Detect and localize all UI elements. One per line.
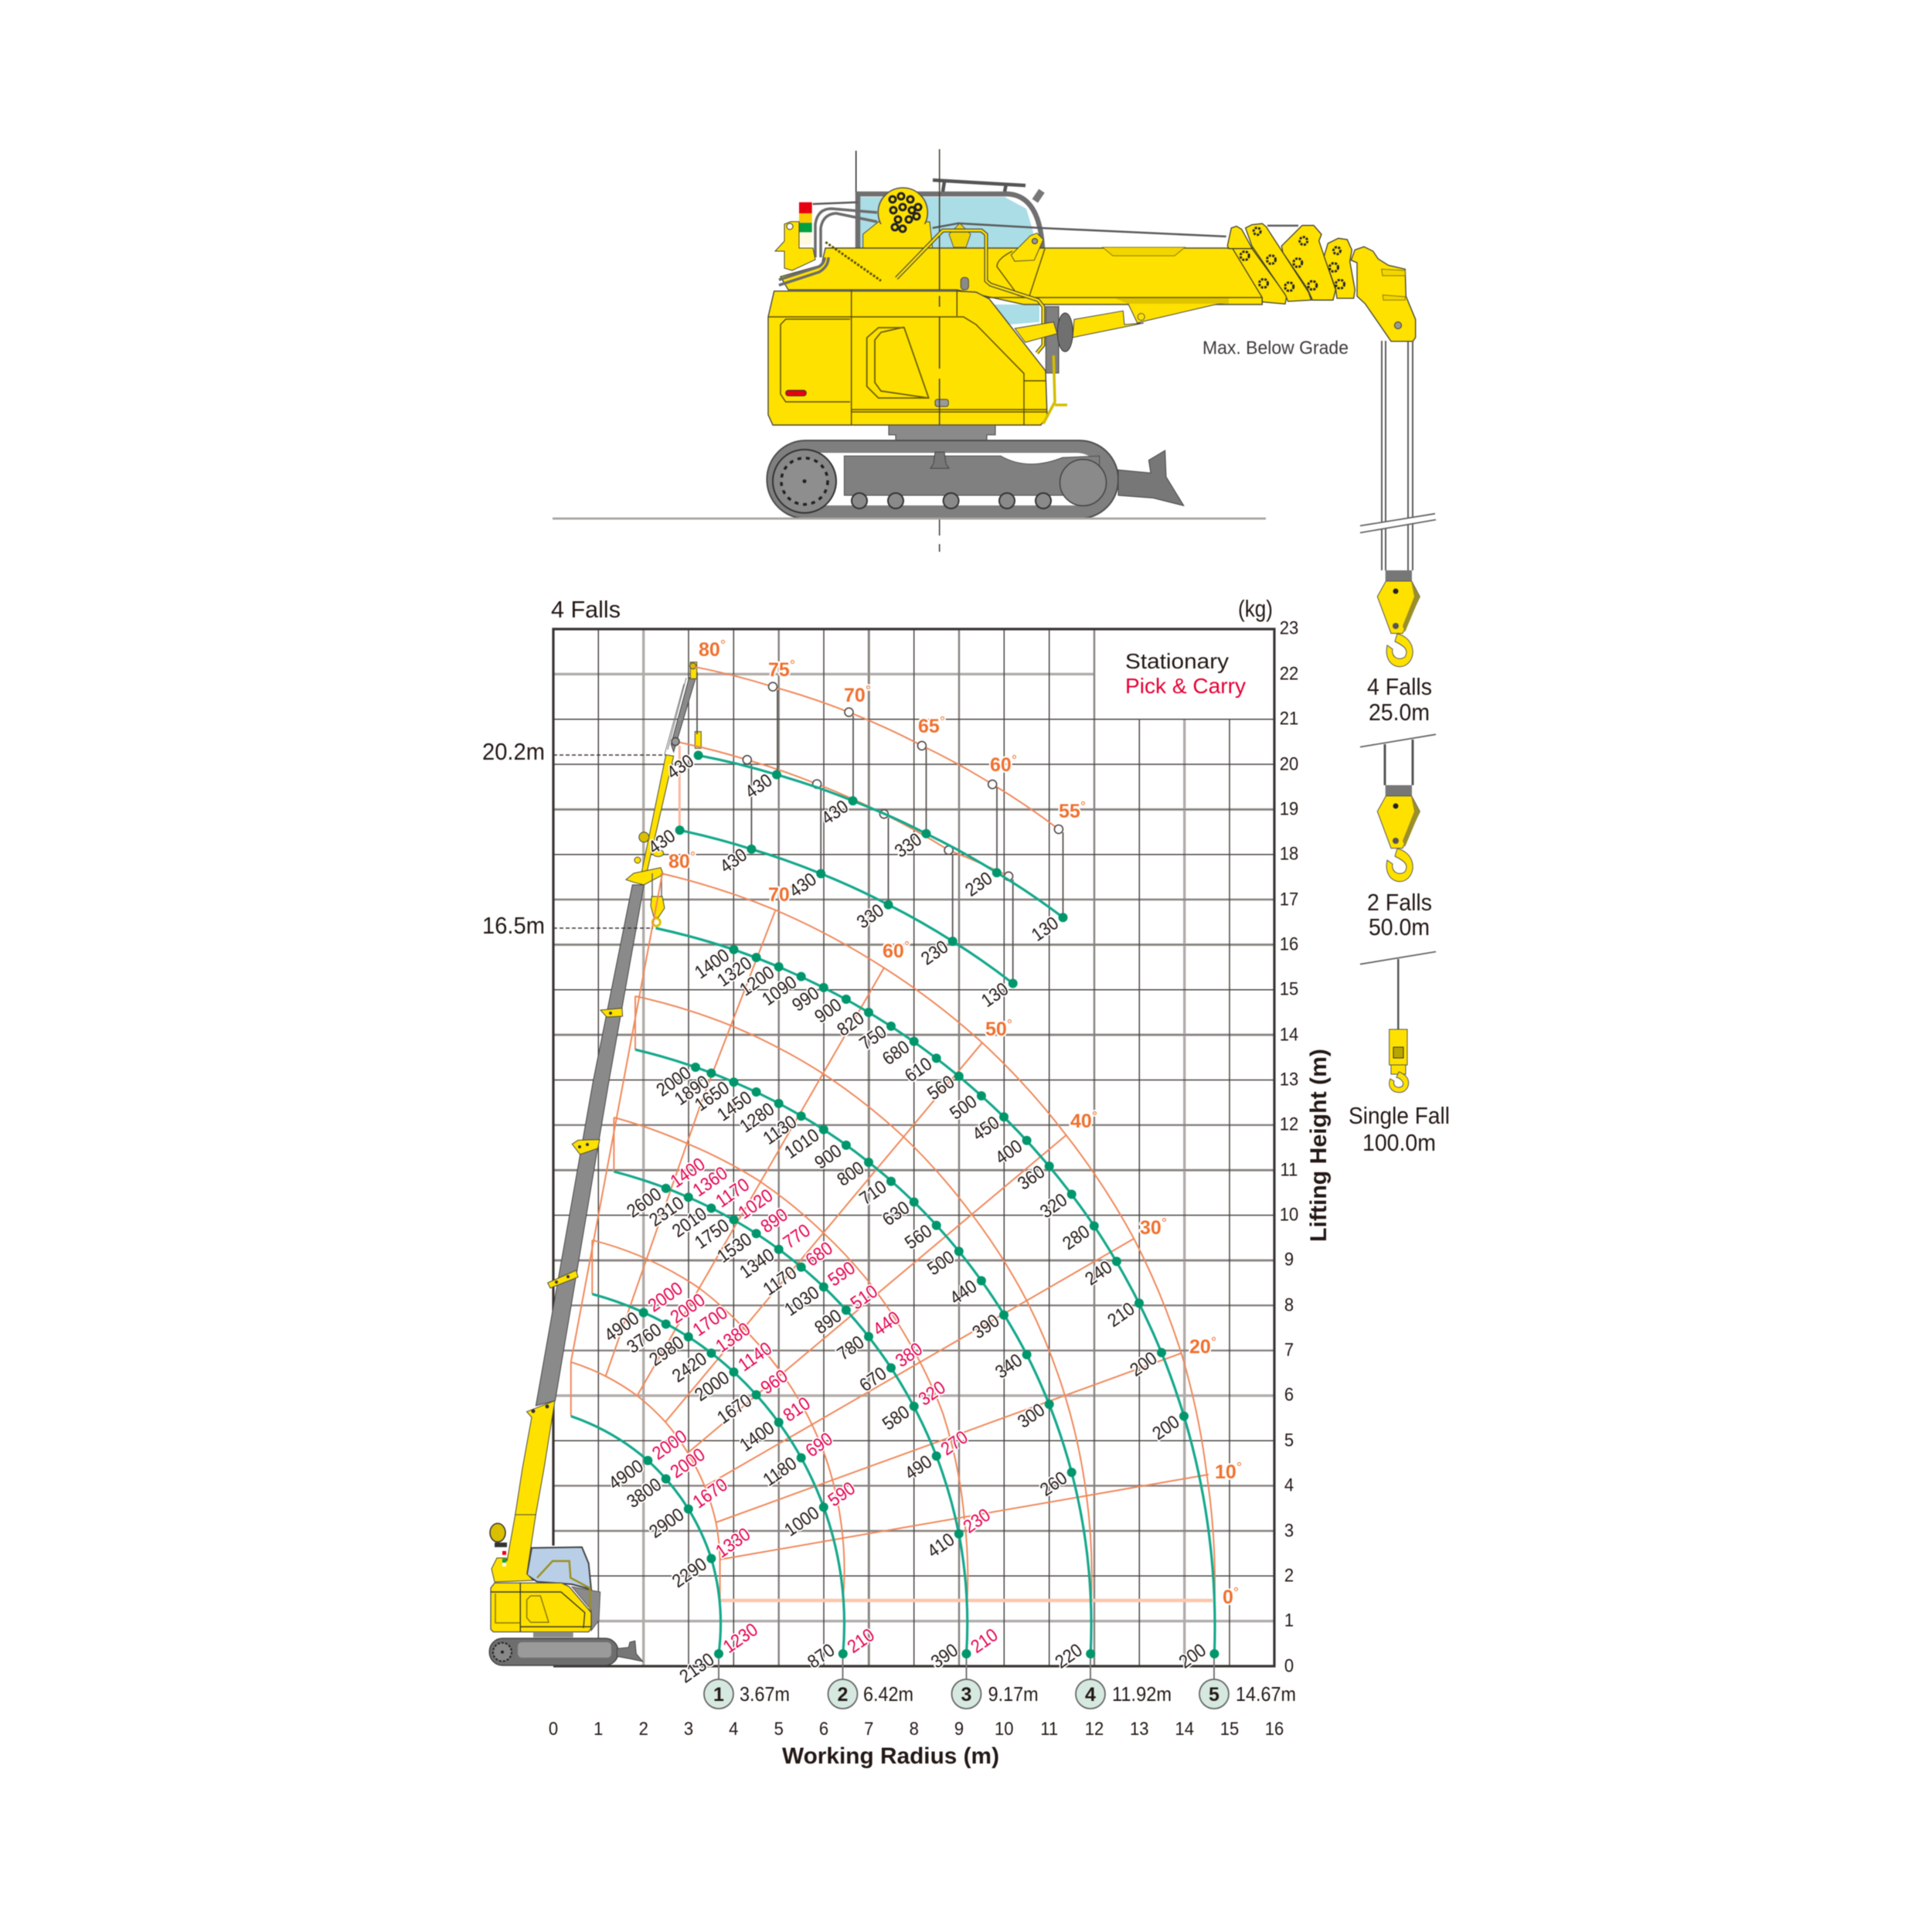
load points: boom position 3: 780 [833, 1331, 868, 1364]
serrated brace [825, 242, 881, 281]
load points: boom position 3: 1170 [712, 1174, 753, 1212]
load points: boom position 5: 200 [1148, 1410, 1183, 1444]
load points: boom position 2: 1140 [734, 1338, 776, 1376]
crane main illustration [553, 149, 1416, 552]
bottom axis: working radius ticks: 7 [864, 1718, 873, 1739]
lower window [995, 304, 1039, 325]
track frame [844, 456, 1100, 495]
load points: boom position 2: 4900 [600, 1307, 643, 1345]
load points: boom position 2: 810 [779, 1393, 814, 1426]
load points: boom position 5: 200 [1126, 1347, 1161, 1380]
boom underside line [985, 297, 1262, 298]
angle labels: 20 [1189, 1336, 1211, 1358]
boom foot fairing [997, 249, 1045, 296]
load points: jib upper curve: 430 [662, 750, 698, 783]
right axis: lifting height ticks: 2 [1284, 1565, 1294, 1586]
load points: boom position 3: 510 [846, 1281, 881, 1314]
body handle [935, 400, 948, 406]
raised boom on chart [515, 662, 701, 1515]
left post [775, 222, 815, 270]
load points: boom position 5: 610 [901, 1053, 936, 1086]
load points: boom position 5: 900 [811, 994, 845, 1027]
load points: boom position 5: 750 [855, 1021, 890, 1054]
load points: boom position 4: 340 [991, 1349, 1026, 1383]
head sheave pin [1394, 321, 1402, 329]
axis title: lifting height: Lifting Height (m) [1306, 1049, 1332, 1242]
load points: boom position 5: 450 [968, 1111, 1003, 1145]
load points: boom position 4: 2000 [652, 1062, 695, 1100]
upper cable [813, 202, 1298, 236]
numbered boom length markers: 2 [838, 1684, 848, 1706]
load points: boom position 2: 1000 [781, 1502, 823, 1540]
angle labels [668, 638, 1242, 1608]
hollow jib tip markers [672, 682, 1063, 880]
angle labels: 65 [918, 716, 940, 737]
load points: boom position 2: 690 [801, 1428, 836, 1461]
angle labels: 70 [844, 685, 866, 706]
luffing cylinder and strut [1015, 298, 1229, 342]
rear mechanism [1046, 307, 1059, 373]
angle labels: ° [1012, 753, 1017, 768]
legend: stationary and pick and carry: Stationary [1125, 649, 1229, 673]
hook block: single fall [1360, 952, 1436, 1093]
bottom axis: working radius ticks: 6 [819, 1718, 828, 1739]
right axis: lifting height ticks: 10 [1280, 1204, 1298, 1225]
load points: jib upper curve: 230 [961, 867, 996, 900]
numbered boom length markers: 1 [713, 1684, 724, 1706]
bottom axis: working radius ticks: 11 [1040, 1718, 1058, 1739]
load points: jib upper curve: 430 [817, 795, 852, 828]
right axis: lifting height ticks: 17 [1280, 889, 1298, 910]
angle labels: 0 [1223, 1587, 1233, 1608]
axis title: working radius: Working Radius (m) [782, 1743, 999, 1769]
text: 2 falls 50.0m [1367, 889, 1432, 940]
load points: boom position 3: 2010 [668, 1202, 710, 1241]
boom head [1351, 247, 1416, 342]
boom pad [1103, 247, 1185, 256]
bottom axis: working radius ticks: 3 [684, 1718, 693, 1739]
load points: boom position 4: 900 [811, 1140, 845, 1173]
right axis: lifting height ticks: 6 [1284, 1384, 1294, 1405]
load points: boom position 4: 1280 [736, 1098, 778, 1137]
angle labels: ° [1007, 1017, 1012, 1032]
load points: boom position 4: 1450 [713, 1087, 756, 1125]
bottom axis: working radius ticks: 10 [995, 1718, 1014, 1739]
legend: stationary and pick and carry [1125, 649, 1246, 698]
load points: boom position 3: 1170 [759, 1262, 801, 1300]
load points: jib upper curve: 130 [1027, 912, 1063, 945]
hose over frame [779, 257, 828, 285]
load points: boom position 2: 2000 [644, 1277, 686, 1316]
right axis: lifting height ticks: 21 [1280, 708, 1298, 729]
load points: jib lower curve: 330 [852, 900, 888, 933]
load points: boom position 3: 410 [923, 1529, 958, 1562]
load points: boom position 3: 1030 [781, 1281, 823, 1320]
bottom axis: working radius ticks: 0 [549, 1718, 558, 1739]
track rollers [852, 493, 1051, 509]
load points: boom position 5: 280 [1059, 1220, 1094, 1253]
angle labels: ° [1233, 1585, 1239, 1600]
angle labels: 40 [1070, 1111, 1092, 1132]
angle labels: ° [690, 849, 696, 865]
dozer blade [1118, 451, 1184, 505]
load points: boom position 4: 560 [901, 1220, 936, 1253]
bottom axis: working radius ticks: 15 [1220, 1718, 1239, 1739]
angle labels: ° [1211, 1335, 1216, 1350]
ground line [553, 518, 1266, 519]
right axis: lifting height ticks: 8 [1284, 1294, 1294, 1315]
signal tower [799, 202, 812, 245]
load points: boom position 1: 2000 [666, 1444, 709, 1482]
boom plates [1227, 223, 1355, 304]
bottom axis: working radius ticks: 5 [774, 1718, 784, 1739]
center swivel [930, 452, 949, 468]
right axis: lifting height ticks: 18 [1280, 843, 1298, 864]
unit: kg: (kg) [1238, 595, 1273, 622]
load points: boom position 2: 2420 [668, 1348, 710, 1386]
yellow body [768, 291, 1047, 425]
angle labels: ° [790, 883, 795, 898]
load points: boom position 2: 210 [843, 1624, 878, 1657]
angle labels: 75 [768, 659, 790, 681]
right axis: lifting height ticks: 7 [1284, 1339, 1294, 1360]
body panel lines [768, 290, 1047, 425]
mirror [1035, 191, 1042, 201]
jib hoist ropes from hollow tip points [697, 672, 1063, 983]
load points: boom position 1: 2000 [648, 1425, 691, 1464]
top handrail [933, 180, 1026, 192]
load points: boom position 4: 1010 [781, 1124, 823, 1162]
load points: boom position 3: 770 [779, 1219, 814, 1253]
text: 2 falls 50.0m: 50.0m [1369, 913, 1430, 940]
numbered boom length markers: 11.92m [1112, 1682, 1172, 1706]
hydraulic hoses [779, 209, 877, 285]
bottom axis: working radius ticks [549, 1718, 1284, 1739]
load points: jib lower curve: 230 [917, 936, 952, 969]
right axis: lifting height ticks: 11 [1281, 1159, 1298, 1180]
idler [1060, 459, 1107, 505]
load points: boom position 5: 1200 [736, 961, 778, 1000]
load points: boom position 3: 320 [914, 1376, 949, 1410]
angle labels: ° [1092, 1109, 1097, 1124]
load points: boom position 4: 1890 [670, 1071, 713, 1109]
right axis: lifting height ticks: 14 [1280, 1024, 1298, 1045]
label: max below grade: Max. Below Grade [1202, 338, 1349, 359]
small crane at chart base [489, 1515, 643, 1665]
load points: boom position 3: 2600 [623, 1183, 665, 1222]
load points: boom position 1: 2900 [645, 1504, 688, 1542]
load points: boom position 3 [623, 1153, 1002, 1672]
right axis: lifting height ticks: 13 [1280, 1069, 1298, 1090]
load points: boom position 1: 3800 [623, 1474, 665, 1512]
angle labels: ° [1162, 1216, 1167, 1231]
right axis: lifting height ticks: 1 [1284, 1610, 1294, 1631]
load points: boom position 1 [604, 1425, 761, 1687]
load points: boom position 2: 2000 [690, 1366, 733, 1405]
turntable [889, 425, 995, 440]
load points: boom position 5: 320 [1036, 1189, 1071, 1222]
load points: jib lower curve: 430 [644, 825, 679, 858]
load points: boom position 3: 440 [869, 1307, 904, 1340]
angle labels: ° [1080, 799, 1086, 815]
right axis: lifting height ticks: 9 [1284, 1249, 1294, 1270]
plate bolts [1240, 228, 1345, 291]
angle labels: ° [720, 638, 726, 653]
load points: boom position 3: 1360 [689, 1162, 731, 1201]
body door window [867, 327, 929, 398]
load points: boom position 1: 2290 [668, 1553, 710, 1592]
load points: jib upper curve: 330 [890, 828, 926, 862]
bottom axis: working radius ticks: 12 [1085, 1718, 1104, 1739]
load points: boom position 3: 2310 [645, 1192, 688, 1230]
load points: boom position 4 [652, 1062, 1095, 1672]
load points: boom position 3: 490 [901, 1451, 936, 1484]
load points: boom position 4: 390 [968, 1310, 1003, 1343]
text: 4 falls 25.0m [1367, 673, 1432, 726]
angle labels: ° [866, 683, 871, 699]
post detail [787, 223, 793, 230]
boom height callout: 16.5m: 16.5m [482, 912, 545, 939]
load points: jib lower curve [644, 825, 1018, 1011]
legend: stationary and pick and carry: Pick & Carry [1125, 674, 1246, 698]
angle labels: 80 [699, 639, 720, 661]
load points: boom position 3: 1530 [713, 1228, 756, 1267]
angle labels: 30 [1140, 1217, 1162, 1239]
text: single fall 100.0m: 100.0m [1362, 1129, 1436, 1156]
angle labels: ° [790, 658, 795, 673]
track outer [767, 440, 1118, 519]
angle labels: ° [904, 939, 910, 954]
angle labels: 55 [1059, 801, 1080, 822]
load points: boom position 5: 560 [923, 1071, 958, 1104]
hook block: 2 falls [1360, 734, 1436, 882]
load points: boom position 3: 210 [967, 1624, 1002, 1657]
load points: boom position 2: 3760 [623, 1318, 665, 1357]
load points: boom position 2: 2000 [666, 1289, 709, 1328]
hook block: 4 falls [1377, 570, 1420, 667]
load points: boom position 3: 1750 [690, 1214, 733, 1253]
angle labels: 50 [985, 1019, 1007, 1040]
load points: boom position 4: 630 [879, 1196, 913, 1230]
load points: boom position 4: 440 [946, 1275, 981, 1308]
load points: boom position 4: 500 [923, 1246, 958, 1279]
load points: boom position 3: 580 [879, 1401, 913, 1434]
load points: boom position 3: 590 [824, 1257, 859, 1291]
load points: jib upper curve [662, 750, 1068, 945]
load points: boom position 4: 1130 [759, 1111, 801, 1148]
load points: boom position 3: 1400 [666, 1153, 709, 1192]
winch [863, 188, 933, 248]
boom knob [961, 277, 968, 290]
right axis: lifting height ticks: 19 [1280, 798, 1298, 819]
load points: boom position 5: 200 [1175, 1639, 1209, 1672]
text: 4 falls 25.0m: 4 Falls [1367, 673, 1432, 700]
load points: boom position 2: 960 [757, 1365, 791, 1398]
load points: boom position 4: 710 [855, 1176, 890, 1209]
numbered boom length markers: 9.17m [988, 1682, 1039, 1706]
load points: boom position 3: 1020 [734, 1185, 777, 1223]
load points: boom position 3: 890 [811, 1304, 845, 1338]
text: single fall 100.0m: Single Fall [1349, 1102, 1450, 1129]
load points: boom position 1: 1330 [712, 1523, 754, 1562]
load points: boom position 3: 670 [855, 1362, 890, 1396]
boom foot lug [1011, 233, 1043, 261]
load points: boom position 1: 4900 [604, 1455, 647, 1494]
load points: boom position 1: 2130 [675, 1648, 718, 1687]
numbered boom length markers [704, 1658, 1296, 1709]
right axis: lifting height ticks [1280, 617, 1298, 1676]
load points: boom position 5: 210 [1104, 1298, 1138, 1331]
track inner gap [782, 453, 1103, 505]
load points: jib lower curve: 430 [785, 868, 820, 901]
load points: boom position 5 [690, 944, 1219, 1672]
load points: boom position 2: 1180 [759, 1452, 801, 1490]
load points: boom position 5: 1090 [758, 971, 801, 1009]
numbered boom length markers: 6.42m [863, 1682, 913, 1706]
load points: boom position 2: 1670 [713, 1389, 756, 1428]
yellow handrail [896, 230, 1043, 353]
step rail [1043, 355, 1067, 423]
load points: boom position 2: 1400 [736, 1417, 778, 1455]
load points: boom position 5: 1320 [713, 952, 756, 991]
bottom axis: working radius ticks: 9 [954, 1718, 964, 1739]
right axis: lifting height ticks: 4 [1284, 1475, 1294, 1495]
load points: boom position 2: 1380 [712, 1318, 754, 1356]
right axis: lifting height ticks: 12 [1280, 1114, 1298, 1134]
load points: boom position 5: 820 [833, 1007, 868, 1040]
right axis: lifting height ticks: 20 [1280, 753, 1298, 774]
boom height callout: 20.2m: 20.2m [482, 738, 545, 765]
bottom axis: working radius ticks: 8 [910, 1718, 919, 1739]
chart frame [553, 629, 1274, 1666]
load points: boom position 1: 1670 [689, 1474, 731, 1512]
load points: boom position 3: 230 [959, 1504, 994, 1537]
load points: boom position 5: 990 [788, 982, 823, 1015]
load points: boom position 5: 1400 [690, 944, 733, 983]
load points: boom position 3: 390 [927, 1639, 962, 1672]
load points: boom position 4: 260 [1036, 1467, 1071, 1500]
angle labels: 60 [883, 940, 904, 962]
head slots [1382, 269, 1405, 300]
load points: boom position 4: 300 [1014, 1399, 1049, 1432]
right axis: lifting height ticks: 22 [1280, 663, 1298, 684]
load points: boom position 2 [600, 1277, 878, 1672]
right axis: lifting height ticks: 5 [1284, 1430, 1294, 1451]
load points: jib lower curve: 430 [716, 844, 750, 877]
right axis: lifting height ticks: 3 [1284, 1520, 1294, 1541]
hoist ropes [1382, 341, 1413, 570]
numbered boom length markers: 3 [961, 1684, 971, 1706]
right axis: lifting height ticks: 16 [1280, 934, 1298, 954]
load points: boom position 5: 240 [1081, 1256, 1116, 1289]
load points: jib lower curve: 130 [978, 978, 1012, 1011]
text: 2 falls 50.0m: 2 Falls [1367, 889, 1432, 916]
numbered boom length markers: 5 [1209, 1684, 1219, 1706]
rope break marks [1360, 514, 1436, 532]
angle labels: 60 [990, 754, 1012, 776]
load points: boom position 4: 800 [833, 1157, 868, 1190]
load points: boom position 3: 890 [757, 1204, 791, 1237]
right axis: lifting height ticks: 23 [1280, 617, 1298, 638]
bottom axis: working radius ticks: 2 [639, 1718, 648, 1739]
load points: boom position 5: 500 [946, 1090, 981, 1124]
right axis: lifting height ticks: 15 [1280, 978, 1298, 999]
cab frame [858, 194, 1043, 248]
load points: boom position 2: 590 [824, 1478, 859, 1511]
load points: boom position 5: 360 [1014, 1161, 1049, 1194]
bottom axis: working radius ticks: 13 [1130, 1718, 1149, 1739]
pendant sheave [949, 223, 971, 247]
load points: boom position 3: 680 [801, 1237, 836, 1270]
load points: boom position 4: 1650 [690, 1077, 733, 1115]
load points: boom position 3: 270 [937, 1426, 971, 1459]
load chart grid [553, 629, 1274, 1666]
sprocket [773, 450, 836, 513]
boom and frame [781, 248, 1262, 304]
load points: boom position 2: 1700 [689, 1301, 731, 1340]
load points: jib upper curve: 430 [741, 769, 776, 802]
text: single fall 100.0m [1349, 1102, 1450, 1156]
right axis: lifting height ticks: 0 [1284, 1655, 1294, 1676]
orange pick and carry arcs and radial angle lines [571, 667, 1215, 1600]
bottom axis: working radius ticks: 1 [594, 1718, 603, 1739]
center line [939, 149, 940, 552]
load points: boom position 3: 1340 [736, 1244, 778, 1282]
load points: boom position 1: 1230 [719, 1618, 761, 1657]
hydraulic accumulator [1057, 313, 1073, 352]
load points: boom position 2: 2980 [645, 1332, 688, 1370]
cab glass [859, 197, 1033, 248]
load points: boom position 2: 870 [804, 1639, 838, 1672]
numbered boom length markers: 14.67m [1236, 1682, 1296, 1706]
bottom axis: working radius ticks: 4 [729, 1718, 739, 1739]
antenna [855, 151, 857, 193]
numbered boom length markers: 3.67m [740, 1682, 790, 1706]
bottom axis: working radius ticks: 14 [1175, 1718, 1194, 1739]
angle labels: 70 [768, 884, 790, 906]
angle labels: ° [940, 714, 945, 730]
load points: boom position 5: 400 [991, 1135, 1026, 1168]
teal load radius curves [571, 755, 1215, 1654]
load points: boom position 3: 380 [891, 1338, 927, 1371]
text: 4 falls 25.0m: 25.0m [1369, 699, 1430, 726]
angle labels: ° [1236, 1460, 1242, 1475]
bottom axis: working radius ticks: 16 [1265, 1718, 1284, 1739]
angle labels: 80 [668, 851, 690, 872]
load points: boom position 5: 680 [879, 1036, 913, 1069]
red tail lights [786, 390, 806, 396]
angle labels: 10 [1215, 1461, 1236, 1483]
heading: 4 Falls: 4 Falls [551, 596, 621, 623]
numbered boom length markers: 4 [1085, 1684, 1096, 1706]
load points: boom position 4: 220 [1051, 1639, 1086, 1672]
